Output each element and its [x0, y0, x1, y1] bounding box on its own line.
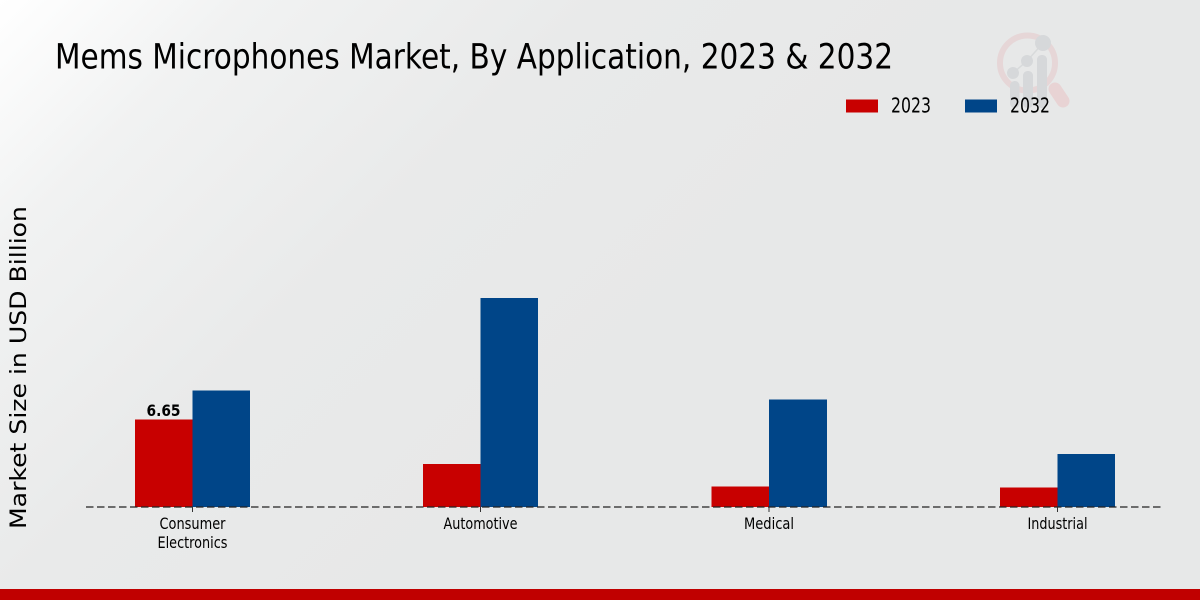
legend item: 2032: 2032 [1010, 94, 1050, 118]
data label: 6.65: 6.65 [146, 401, 180, 420]
bar chart [86, 298, 1164, 552]
legend item: 2032 [965, 94, 1050, 118]
icon: watermark logo [1000, 35, 1063, 108]
y axis label: Market Size in USD Billion [6, 206, 32, 529]
category label: Consumer Electronics: Consumer [160, 514, 226, 533]
legend item: 2023: 2023 [891, 94, 931, 118]
category label: Consumer Electronics [158, 514, 228, 552]
category label: Medical: Medical [744, 514, 794, 533]
category label: Automotive: Automotive [444, 514, 518, 533]
legend [846, 94, 1050, 118]
bars: Medical [712, 400, 827, 507]
category label: Consumer Electronics: Electronics [158, 533, 228, 552]
bars: Consumer Electronics [135, 390, 250, 507]
bars: Industrial [1000, 454, 1115, 507]
footer bar [0, 589, 1200, 600]
bars: Automotive [423, 298, 538, 507]
legend item: 2023 [846, 94, 931, 118]
title: Mems Microphones Market, By Application, 2023 & 2032 [55, 38, 893, 78]
category label: Industrial: Industrial [1028, 514, 1088, 533]
